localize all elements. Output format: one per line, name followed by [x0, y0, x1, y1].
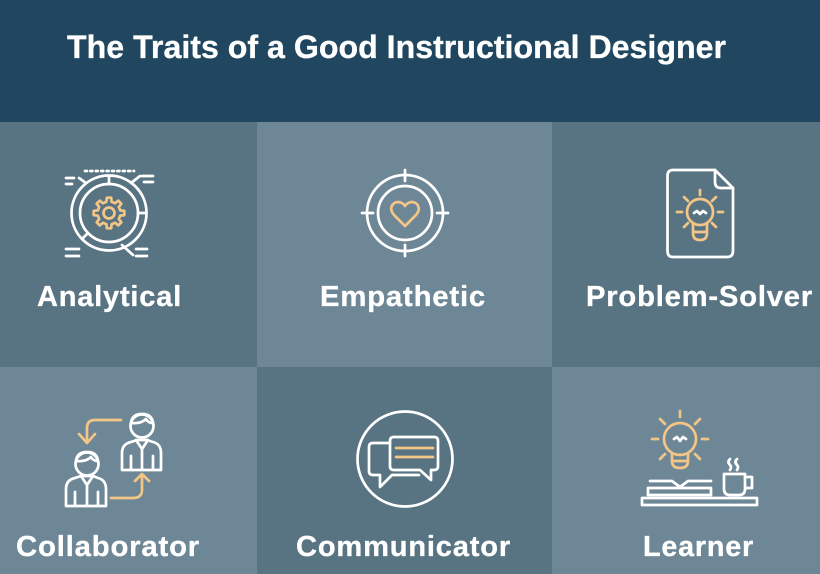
panel: collaborator — [0, 367, 257, 574]
label: collaborator: Collaborator — [16, 531, 200, 563]
title: The Traits of a Good Instructional Designer — [67, 29, 726, 65]
panel: communicator — [257, 367, 552, 574]
label: empathetic: Empathetic — [320, 281, 486, 313]
panel: learner — [552, 367, 820, 574]
label: learner: Learner — [643, 531, 754, 563]
label: problem-solver: Problem-Solver — [586, 281, 813, 313]
icon: lightbulb document — [668, 170, 733, 257]
label: analytical: Analytical — [37, 281, 182, 313]
icon: speech bubbles in circle — [358, 412, 452, 506]
header band — [0, 0, 820, 122]
label: communicator: Communicator — [296, 531, 511, 563]
panel: empathetic — [257, 122, 552, 367]
icon: analytical gear in circle — [66, 171, 153, 256]
panel: analytical — [0, 122, 257, 367]
icon: heart in target — [362, 170, 448, 256]
icon: two people exchanging arrows — [66, 414, 161, 506]
panel: problem-solver — [552, 122, 820, 367]
icon: lightbulb, book and coffee cup — [642, 411, 757, 505]
